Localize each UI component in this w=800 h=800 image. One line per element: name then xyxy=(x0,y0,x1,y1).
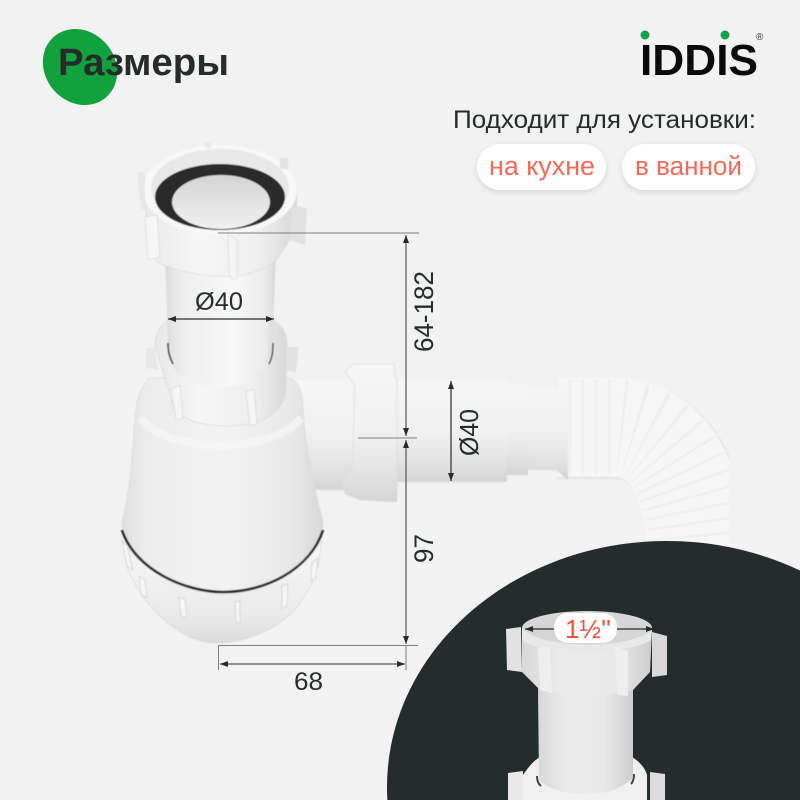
logo: IDDIS: IDDIS xyxy=(640,36,758,85)
pill: в ванной xyxy=(622,144,755,190)
diameter arrow on vertical tube xyxy=(168,318,274,320)
inset label: 1½'' xyxy=(565,614,611,644)
extension lines xyxy=(218,233,419,670)
inset lower collar xyxy=(508,757,665,800)
label: 64-182: 64-182 xyxy=(409,271,439,352)
heading: Размеры xyxy=(27,14,229,120)
product photo: bottle siphon with flexible hose xyxy=(122,142,700,643)
logo: IDDIS: ® xyxy=(756,32,764,43)
label: 68: 68 xyxy=(294,668,323,696)
top nut xyxy=(137,142,307,280)
label: Ø40 side pipe: Ø40 xyxy=(454,409,484,456)
green blob xyxy=(27,14,133,120)
installation note: Подходит для установки: xyxy=(453,106,756,134)
side pipe xyxy=(296,377,568,490)
siphon bowl xyxy=(122,378,323,592)
black sealing ring xyxy=(122,530,323,592)
inset arrow xyxy=(525,628,654,630)
corrugated hose xyxy=(556,427,700,570)
dark circle panel xyxy=(387,541,800,800)
dimension 68 arrow xyxy=(220,663,405,665)
vertical tube xyxy=(165,255,276,387)
label: Ø40 tube: Ø40 xyxy=(195,288,243,316)
label: 97: 97 xyxy=(409,534,439,563)
dimension 64-182 arrow xyxy=(405,235,407,436)
diameter arrow on side pipe xyxy=(450,381,452,481)
side nut xyxy=(343,364,397,502)
heading text: Размеры xyxy=(58,42,229,84)
pill: на кухне xyxy=(477,144,606,190)
pill: на кухне: на кухне xyxy=(489,151,595,181)
lower collar xyxy=(146,318,299,426)
dimension lines xyxy=(168,233,451,670)
inset nut xyxy=(506,611,667,696)
inner opening xyxy=(172,175,270,229)
dimension 97 arrow xyxy=(405,440,407,644)
rubber seal xyxy=(155,164,285,230)
inset tube xyxy=(538,688,633,794)
inset: close-up of connection xyxy=(506,611,667,800)
pill: в ванной: в ванной xyxy=(635,151,742,181)
cup lugs xyxy=(122,542,318,623)
bowl shoulder shading xyxy=(140,418,301,446)
lower cup xyxy=(122,540,322,643)
